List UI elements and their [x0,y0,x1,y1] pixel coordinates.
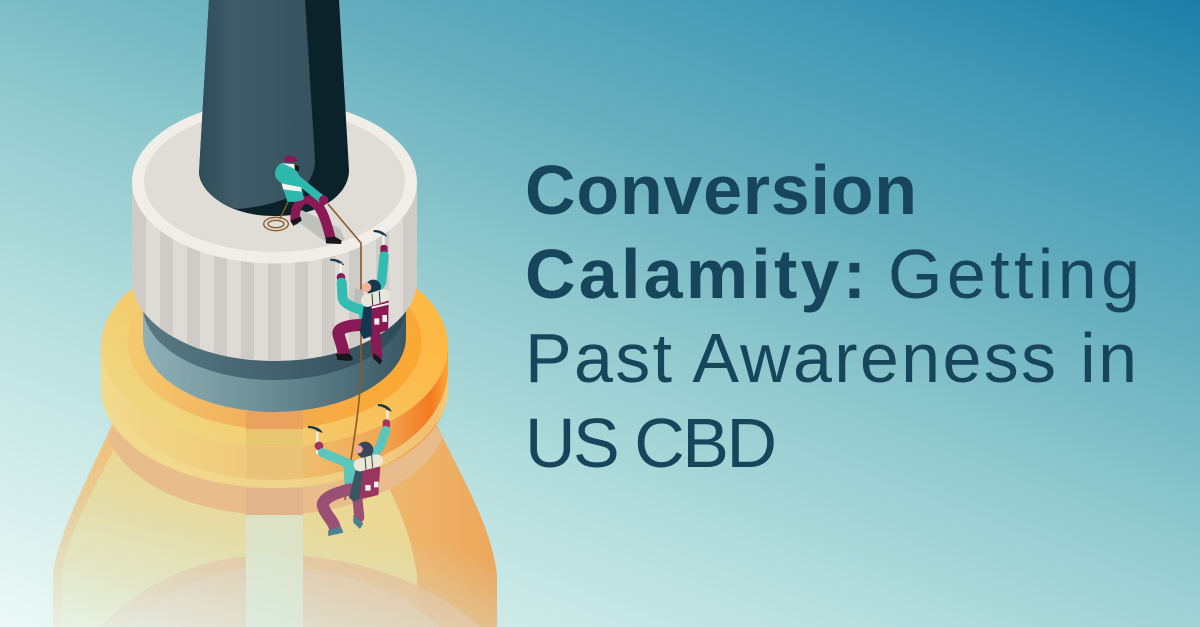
headline [525,151,1140,482]
dropper bulb [199,0,349,216]
headline: Calamity: [525,235,866,313]
bottle body [53,424,497,627]
backpack [360,292,389,339]
rope coil [264,201,289,231]
ice axe left [331,259,345,282]
bottle cap [132,100,417,370]
climber 3: hanging on collar [308,405,391,536]
illustration: CBD dropper bottle [53,0,497,627]
climber 1: belayer on cap [264,156,345,244]
bottle neck ring [107,422,443,515]
dark neck under cap [143,290,406,412]
ice axe right [374,231,388,254]
orange collar [101,245,448,488]
backpack [349,455,380,502]
headline: Getting [888,235,1140,313]
ice axe left [308,427,323,454]
climber 2: on cap side [331,231,389,365]
headline: US CBD [525,404,777,482]
headline: Past Awareness in [525,319,1137,397]
headline: Conversion [525,151,917,229]
climbing rope [328,204,361,500]
ice axe right [378,405,391,429]
